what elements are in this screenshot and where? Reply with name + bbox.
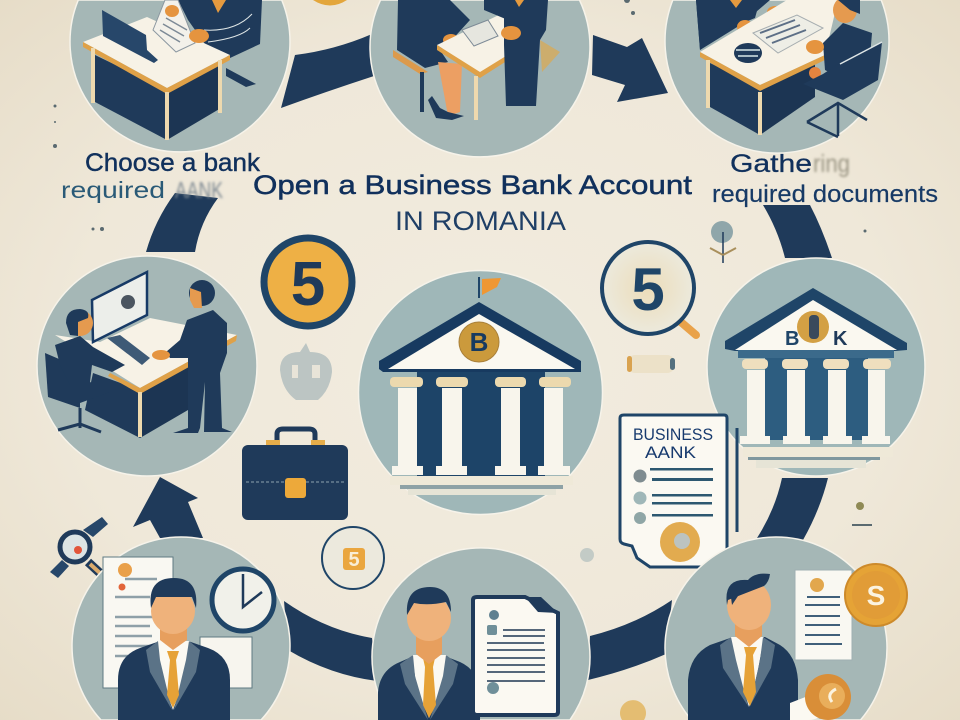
icon: man advisor — [484, 0, 548, 106]
panel: person with document — [372, 548, 590, 720]
icon: advisor — [696, 0, 783, 68]
icon: dollar coin — [845, 564, 907, 626]
text: step one subtitle: AANK — [175, 177, 223, 203]
text: document title: BUSINESS — [633, 425, 713, 444]
icon: desk — [83, 17, 230, 140]
icon: businessman — [378, 587, 480, 720]
icon: bank label B: B — [785, 328, 799, 350]
icon: flag — [479, 277, 501, 298]
panel: signing meeting — [370, 0, 590, 157]
icon: papers — [462, 20, 498, 46]
icon: steps — [743, 447, 893, 468]
icon: coin — [797, 311, 829, 343]
panel: gather documents meeting — [665, 0, 889, 153]
icon: businessman — [118, 578, 230, 720]
text: step three: Gathe — [730, 150, 812, 178]
icon: small faded mark — [580, 548, 594, 562]
icon: coin in hand — [805, 674, 851, 720]
icon: dollar coin: S — [867, 580, 885, 611]
icon: magnifier with five — [602, 242, 696, 335]
icon: magnifier with five: 5 — [631, 256, 665, 323]
icon: laptop — [102, 10, 158, 63]
icon: businessman — [688, 574, 798, 720]
icon: desk — [700, 0, 838, 135]
icon: keyboard — [107, 335, 150, 365]
arrow: step 4 to step 5 — [588, 600, 672, 680]
text: step three — [730, 150, 850, 178]
title: Open a Business Bank Account — [253, 170, 693, 200]
icon: business account document — [620, 415, 737, 567]
icon: magnifying glass and tools — [50, 517, 114, 586]
icon: woman client — [393, 0, 470, 120]
icon: bottom coin — [620, 700, 646, 720]
icon: desk — [55, 318, 237, 438]
text: document subtitle: AANK — [645, 443, 697, 462]
icon: bank body — [417, 372, 545, 476]
text: step one: Choose a bank — [85, 149, 261, 177]
text: step one subtitle — [61, 177, 223, 203]
icon: back document — [200, 637, 252, 688]
icon: frieze — [738, 350, 894, 358]
icon: chair — [803, 42, 882, 137]
icon: roof — [725, 288, 907, 351]
icon: faded crown — [280, 343, 332, 400]
icon: bank coin: B — [470, 327, 488, 357]
subtitle: IN ROMANIA — [395, 206, 566, 236]
icon: table — [437, 12, 527, 120]
icon: chair base — [226, 68, 256, 87]
panel: person with coin — [665, 537, 887, 720]
icon: hand — [790, 696, 822, 720]
icon: steps — [390, 476, 573, 495]
panel: left consultation — [37, 256, 257, 476]
icon: body — [765, 356, 868, 440]
panel: person with clock — [72, 537, 290, 720]
text: step one subtitle: required — [61, 177, 165, 203]
icon: seal — [660, 522, 700, 562]
icon: papers and hands — [153, 0, 209, 52]
badge: number five — [264, 238, 352, 326]
arrow: right bank to step 4 — [757, 478, 828, 540]
icon: columns — [740, 359, 891, 444]
icon: bank pediment — [388, 314, 575, 369]
badge: number five: 5 — [291, 250, 325, 319]
text: step three subtitle: required documents — [712, 181, 938, 208]
arrow: step 6 up to step 7 — [133, 477, 203, 538]
panel: choose a bank meeting — [70, 0, 290, 152]
icon: bank label K: K — [833, 328, 848, 350]
arrow: step 5 to step 6 — [284, 601, 377, 681]
arrow: flow segments — [133, 34, 832, 681]
icon: clock — [212, 569, 274, 631]
icon: tiny marks — [53, 0, 872, 525]
icon: seated client — [55, 309, 125, 403]
icon: chair — [540, 40, 560, 72]
icon: top coin — [313, 0, 347, 6]
icon: pediment — [735, 300, 897, 350]
icon: briefcase — [242, 429, 348, 520]
panel: central bank — [358, 270, 602, 514]
arrow: step 1 to step 2 — [281, 34, 374, 108]
arrow: step 7 to step 1 — [146, 193, 218, 252]
icon: documents — [753, 15, 823, 53]
panel: right bank — [707, 258, 925, 476]
icon: document — [473, 597, 558, 715]
icon: leaf — [710, 221, 736, 263]
icon: pill — [627, 355, 675, 373]
arrow: step 3 to right bank — [763, 205, 832, 258]
icon: chair — [45, 353, 101, 432]
icon: small coin — [322, 527, 384, 589]
icon: columns — [390, 377, 571, 475]
icon: front document — [103, 557, 173, 688]
arrow: step 2 to step 3 — [592, 35, 668, 102]
icon: client — [806, 0, 872, 79]
icon: striped badge — [734, 43, 762, 63]
icon: document list — [634, 468, 713, 524]
icon: bank coin — [459, 322, 499, 362]
icon: standing advisor — [152, 280, 232, 433]
icon: small coin: 5 — [348, 549, 360, 571]
icon: monitor — [92, 272, 147, 342]
icon: bank roof — [379, 302, 581, 372]
icon: document — [795, 570, 852, 660]
text: step three: ring — [813, 150, 850, 178]
icon: advisor — [178, 0, 262, 58]
